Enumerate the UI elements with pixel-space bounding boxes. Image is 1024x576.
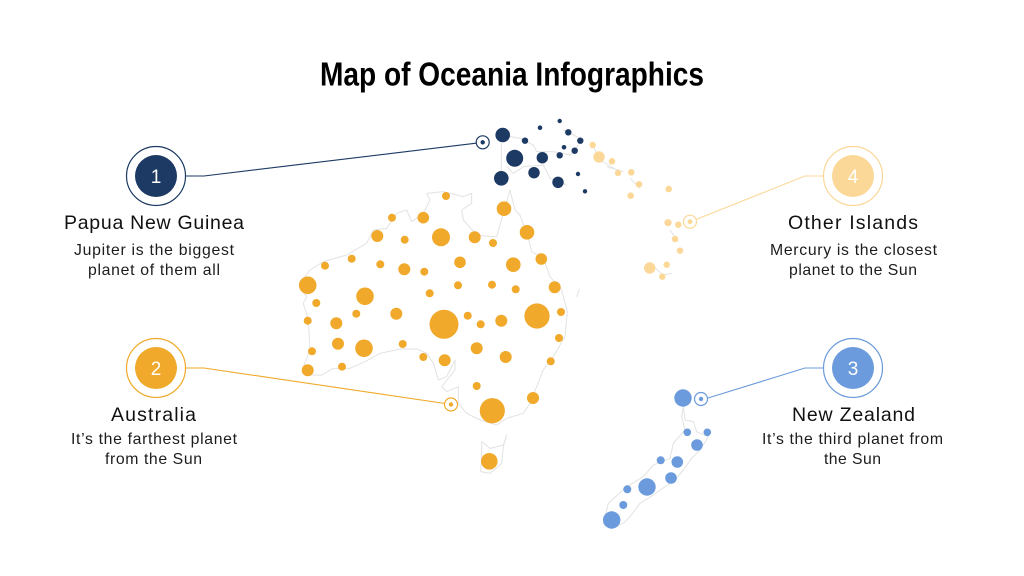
badge 4: 4 xyxy=(848,167,859,188)
heading 2: Australia xyxy=(111,404,196,426)
body 1: Jupiter is the biggest xyxy=(74,242,235,259)
badge 3 xyxy=(824,338,882,398)
marker 2 xyxy=(444,398,458,411)
body 3: It’s the third planet from xyxy=(762,431,943,448)
panel: Other Islands xyxy=(684,146,938,279)
body 2: from the Sun xyxy=(105,451,202,468)
panel: Papua New Guinea xyxy=(64,136,489,279)
marker 1 xyxy=(476,136,489,149)
dots: New Zealand xyxy=(603,389,711,529)
body 3: the Sun xyxy=(824,451,881,468)
body 4 xyxy=(770,242,938,279)
marker 4 xyxy=(684,215,696,228)
title: Map of Oceania Infographics xyxy=(320,56,704,92)
heading 4: Other Islands xyxy=(788,212,918,234)
badge 2 xyxy=(126,338,186,398)
map outline: Papua New Guinea and islands xyxy=(501,130,678,275)
connector 2 xyxy=(186,368,445,404)
body 1: planet of them all xyxy=(88,262,220,279)
badge 4 xyxy=(824,146,882,206)
badge 1 xyxy=(126,146,186,206)
heading 1: Papua New Guinea xyxy=(64,212,244,234)
badge 3: 3 xyxy=(848,359,858,380)
badge 1: 1 xyxy=(151,167,161,188)
dots: Papua New Guinea xyxy=(494,119,587,194)
body 4: planet to the Sun xyxy=(789,262,917,279)
connector 1 xyxy=(186,143,476,176)
badge 2: 2 xyxy=(151,359,161,380)
map outline: New Zealand xyxy=(603,407,708,528)
marker 3 xyxy=(694,392,708,406)
body 2: It’s the farthest planet xyxy=(71,431,238,448)
heading 3: New Zealand xyxy=(792,404,915,426)
dots: Other Islands xyxy=(590,142,683,280)
body 1 xyxy=(74,242,235,279)
map outline: Australia xyxy=(300,190,579,473)
panel: New Zealand xyxy=(694,338,943,468)
dots: Australia xyxy=(299,192,565,470)
body 4: Mercury is the closest xyxy=(770,242,938,259)
connector 4 xyxy=(696,176,823,220)
body 3 xyxy=(762,431,943,468)
panel: Australia xyxy=(71,338,458,468)
body 2 xyxy=(71,431,238,468)
connector 3 xyxy=(708,368,823,398)
